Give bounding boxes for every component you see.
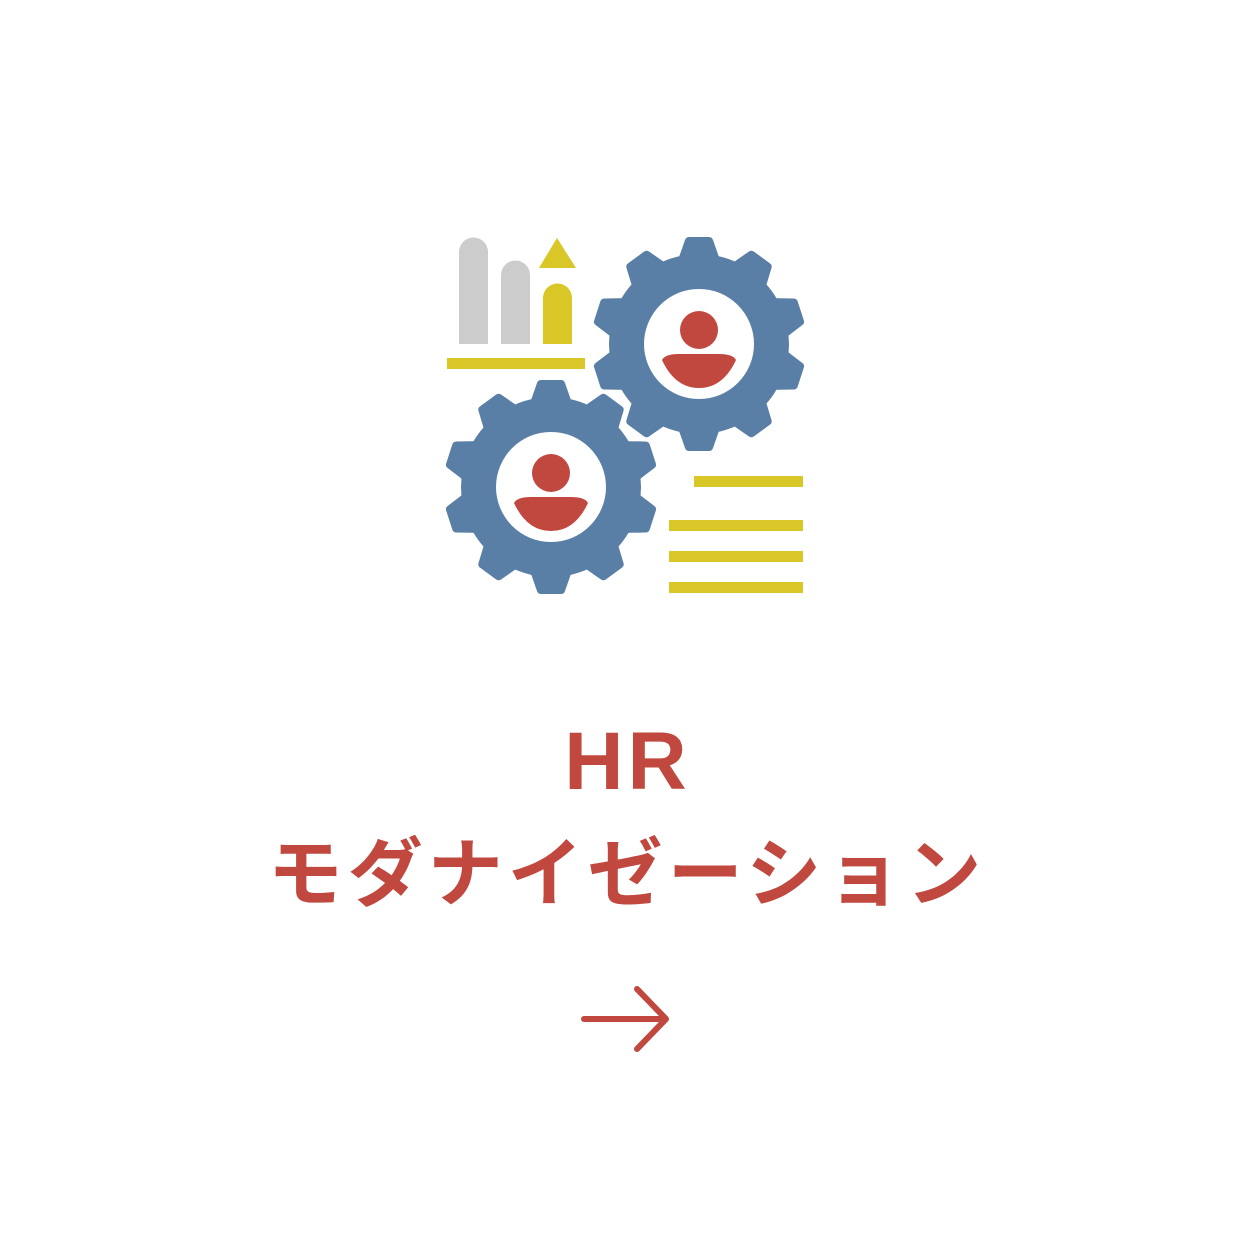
title: HR: HR xyxy=(564,716,691,807)
text lines icon xyxy=(669,476,803,593)
icon: lower gear with person xyxy=(443,380,659,594)
bar chart xyxy=(447,238,585,369)
icon: upper gear with person xyxy=(591,237,807,451)
arrow xyxy=(584,989,666,1049)
title: modernization: モダナイゼーション xyxy=(268,832,986,916)
